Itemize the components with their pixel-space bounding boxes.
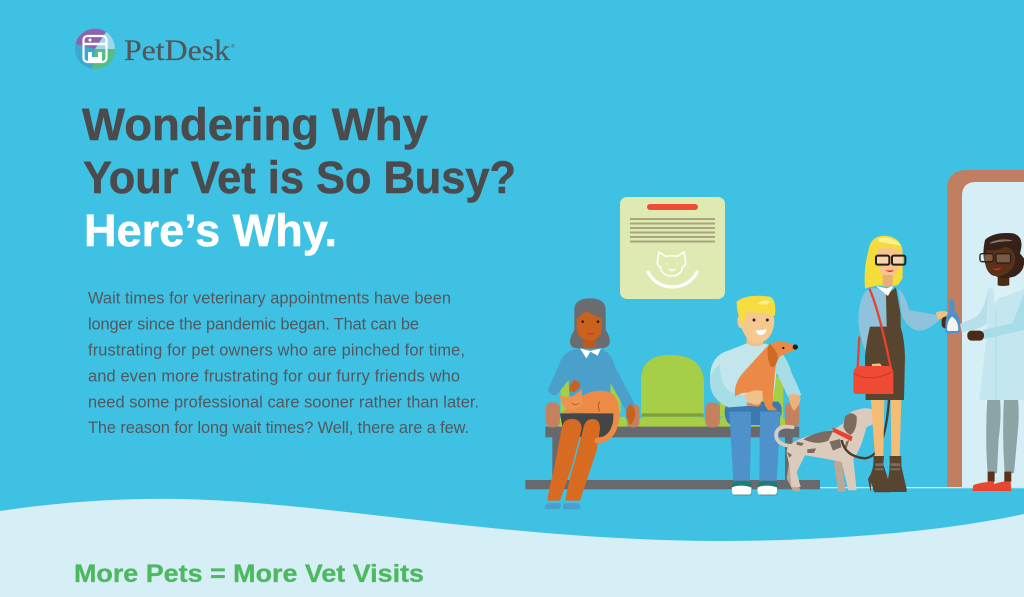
bench <box>525 355 820 489</box>
door <box>947 170 1024 488</box>
man <box>710 296 801 495</box>
woman with glasses <box>853 236 948 492</box>
intro paragraph <box>88 290 479 437</box>
floor line <box>815 487 1024 488</box>
intro paragraph: Wait times for veterinary appointments have been <box>88 290 451 308</box>
brown dog <box>735 341 798 410</box>
intro paragraph: longer since the pandemic began. That can be <box>88 316 419 334</box>
spotted dog on leash <box>776 378 890 492</box>
intro paragraph: frustrating for pet owners who are pinched for time, <box>88 342 465 360</box>
section heading: More Pets = More Vet Visits <box>74 560 424 588</box>
wave section background <box>0 499 1024 597</box>
vet <box>942 233 1024 491</box>
woman <box>545 298 635 509</box>
title: Your Vet is So Busy? <box>83 152 516 203</box>
logo: PetDesk: ® <box>231 43 235 50</box>
woman with dog, vet, bottle <box>776 233 1024 492</box>
cat <box>559 380 618 441</box>
waiting bench scene: woman with cat and man with dog <box>525 296 820 509</box>
title: Here’s Why. <box>84 205 337 256</box>
title <box>82 99 516 256</box>
intro paragraph: need some professional care sooner rather than later. <box>88 394 479 412</box>
bottle <box>945 299 960 333</box>
wall poster with cat <box>620 197 725 299</box>
logo: PetDesk: PetDesk <box>124 35 230 67</box>
intro paragraph: The reason for long wait times? Well, there are a few. <box>88 419 469 437</box>
intro paragraph: and even more frustrating for our furry friends who <box>88 368 460 386</box>
logo: PetDesk <box>75 29 235 69</box>
title: Wondering Why <box>82 99 428 150</box>
